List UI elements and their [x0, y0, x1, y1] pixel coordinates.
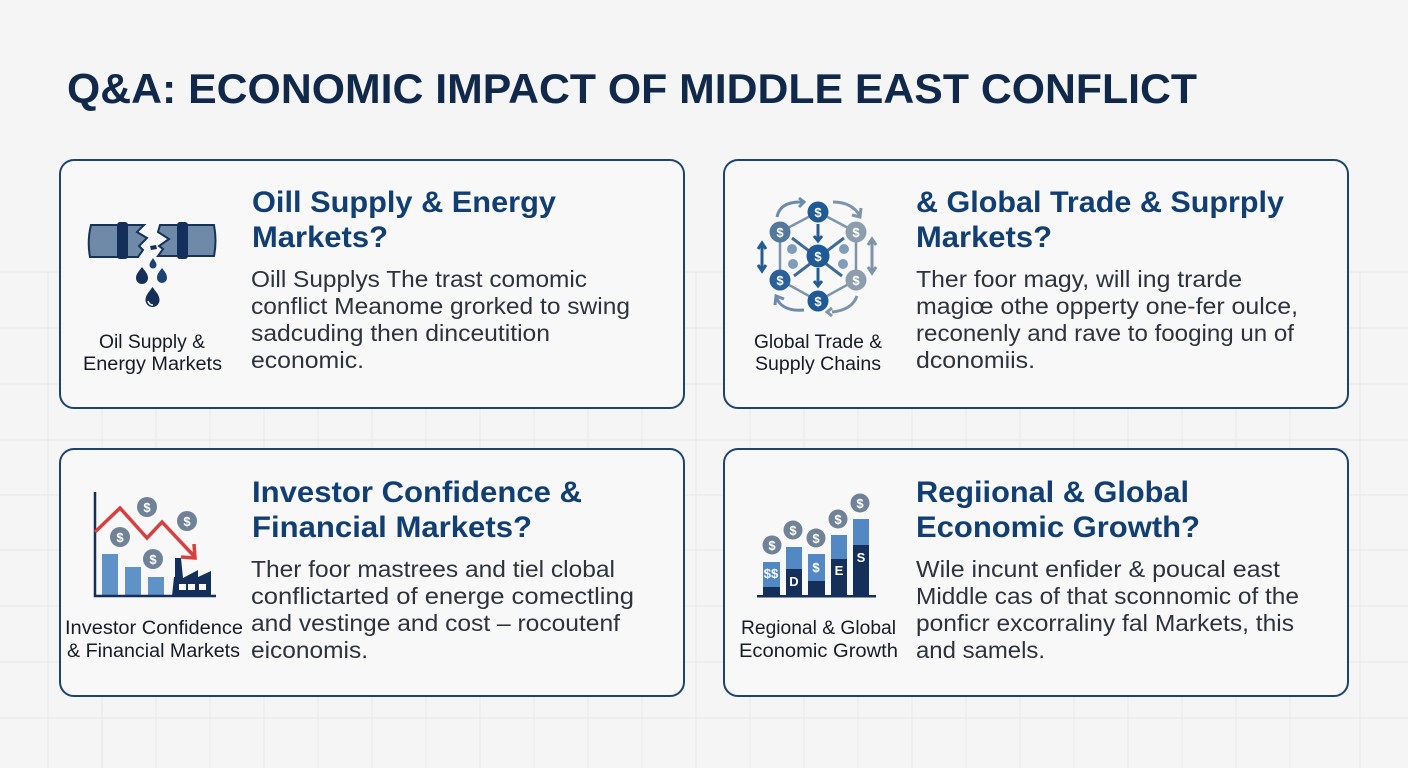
- body text: investor confidence: Ther foor mastrees and tiel clobal: [251, 556, 615, 582]
- icon: rising bar chart with coins: [757, 494, 876, 598]
- heading: regional growth: Regiional & Global: [916, 476, 1189, 509]
- icon: rising bar chart with coins: $: [789, 523, 797, 538]
- icon: rising bar chart with coins: E: [835, 563, 844, 578]
- panel: global trade and supply chains: [724, 160, 1348, 408]
- icon: trade network: $: [814, 249, 822, 264]
- body text: global trade: magiœ othe opperty one-fer oulce,: [916, 293, 1298, 319]
- title: Q&A: ECONOMIC IMPACT OF MIDDLE EAST CONFLICT: [67, 65, 1197, 112]
- icon: trade network: $: [776, 273, 784, 288]
- caption: oil supply: Energy Markets: [83, 354, 222, 375]
- panel: oil supply and energy markets: [60, 160, 684, 408]
- heading: investor confidence: [252, 476, 582, 544]
- icon: rising bar chart with coins: $: [768, 538, 776, 553]
- body text: global trade: reconenly and rave to fooging un of: [916, 320, 1295, 346]
- body text: regional growth: and samels.: [916, 637, 1045, 663]
- icon: broken pipeline with oil drops: [89, 222, 216, 307]
- heading: investor confidence: Investor Confidence &: [252, 476, 582, 509]
- body text: oil supply: [251, 266, 630, 373]
- body text: regional growth: [916, 556, 1299, 663]
- caption: investor confidence: Investor Confidence: [65, 618, 243, 639]
- body text: global trade: Ther foor magy, will ing trarde: [916, 266, 1242, 292]
- icon: rising bar chart with coins: $: [812, 560, 820, 575]
- heading: oil supply: Markets?: [252, 221, 388, 254]
- body text: investor confidence: eiconomis.: [251, 637, 368, 663]
- caption: global trade: Global Trade &: [754, 332, 882, 353]
- icon: falling market chart with factory: [95, 492, 216, 596]
- body text: investor confidence: and vestinge and cost – rocoutenf: [251, 610, 621, 636]
- caption: investor confidence: & Financial Markets: [67, 641, 240, 662]
- caption: global trade: Supply Chains: [755, 354, 881, 375]
- heading: investor confidence: Financial Markets?: [252, 511, 532, 544]
- caption: regional growth: Regional & Global: [741, 618, 896, 639]
- body text: global trade: dconomiis.: [916, 347, 1035, 373]
- icon: trade network: $: [776, 225, 784, 240]
- heading: global trade: & Global Trade & Suprply: [916, 186, 1284, 219]
- heading: oil supply: [252, 186, 556, 254]
- caption: investor confidence: [65, 618, 243, 662]
- panel: investor confidence and financial markets: [60, 449, 684, 696]
- heading: regional growth: Economic Growth?: [916, 511, 1200, 544]
- heading: global trade: [916, 186, 1284, 254]
- icon: trade network: [758, 198, 876, 316]
- panel: regional and global economic growth: [724, 449, 1348, 696]
- icon: falling market chart with factory: $: [183, 514, 191, 529]
- icon: falling market chart with factory: $: [143, 500, 151, 515]
- body text: investor confidence: [251, 556, 634, 663]
- caption: oil supply: [83, 332, 222, 375]
- icon: rising bar chart with coins: D: [789, 574, 799, 589]
- caption: regional growth: Economic Growth: [739, 641, 898, 662]
- body text: oil supply: sadcuding then dinceutition: [251, 320, 550, 346]
- caption: global trade: [754, 332, 882, 375]
- body text: oil supply: conflict Meanome grorked to swing: [251, 293, 630, 319]
- icon: rising bar chart with coins: $$: [764, 566, 779, 581]
- body text: investor confidence: conflictarted of energe comectling: [251, 583, 634, 609]
- icon: trade network: $: [852, 225, 860, 240]
- icon: falling market chart with factory: $: [149, 552, 157, 567]
- icon: rising bar chart with coins: $: [834, 512, 842, 527]
- icon: falling market chart with factory: $: [116, 530, 124, 545]
- body text: oil supply: economic.: [251, 347, 364, 373]
- icon: rising bar chart with coins: S: [857, 550, 866, 565]
- icon: rising bar chart with coins: $: [856, 496, 864, 511]
- icon: trade network: $: [814, 205, 822, 220]
- body text: regional growth: Middle cas of that sconnomic of the: [916, 583, 1299, 609]
- heading: global trade: Markets?: [916, 221, 1052, 254]
- icon: trade network: $: [814, 294, 822, 309]
- body text: regional growth: ponficr excorraliny fal Markets, this: [916, 610, 1294, 636]
- icon: trade network: $: [852, 273, 860, 288]
- body text: regional growth: Wile incunt enfider & poucal east: [916, 556, 1281, 582]
- caption: regional growth: [739, 618, 898, 662]
- heading: regional growth: [916, 476, 1200, 544]
- icon: rising bar chart with coins: $: [812, 531, 820, 546]
- body text: oil supply: Oill Supplys The trast comomic: [251, 266, 587, 292]
- caption: oil supply: Oil Supply &: [99, 332, 205, 353]
- body text: global trade: [916, 266, 1298, 373]
- heading: oil supply: Oill Supply & Energy: [252, 186, 556, 219]
